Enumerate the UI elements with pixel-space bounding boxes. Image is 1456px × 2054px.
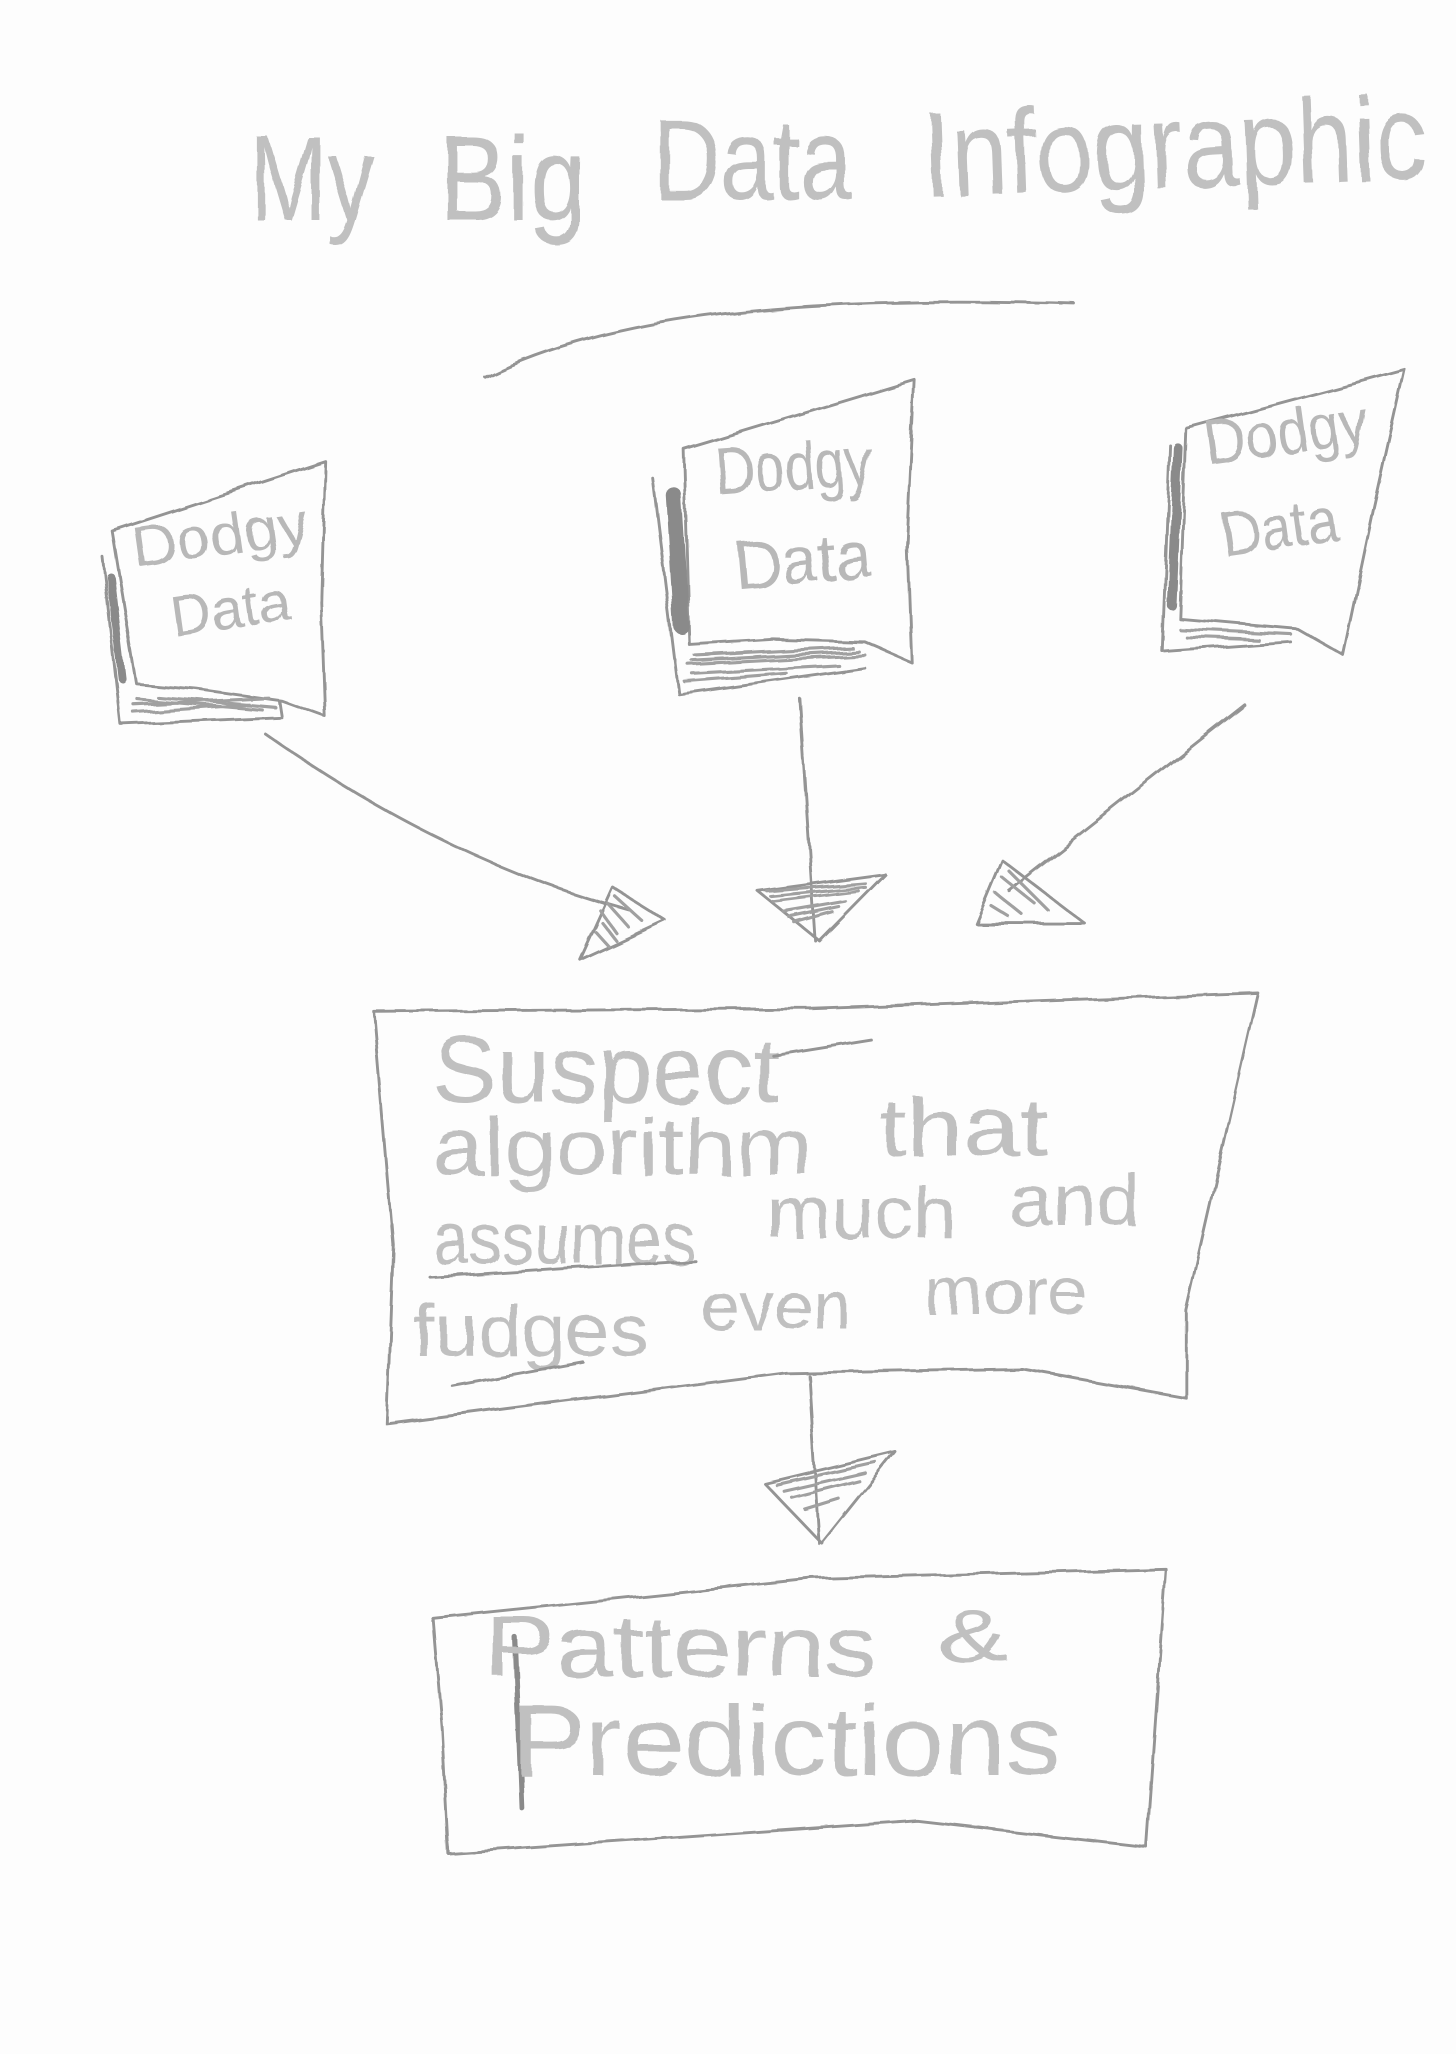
panel: suspect algorithm box: more: [924, 1255, 1088, 1328]
panel: suspect algorithm box: much: [767, 1172, 957, 1254]
panel: suspect algorithm box: even: [701, 1269, 852, 1345]
panel: left dodgy data book: [102, 461, 325, 724]
arrow: right book to algorithm: [976, 705, 1245, 924]
title: Big: [439, 111, 586, 246]
panel: suspect algorithm box: algorithm: [433, 1102, 812, 1193]
panel: right dodgy data book: Dodgy: [1200, 387, 1373, 479]
panel: right dodgy data book: Data: [1216, 485, 1343, 571]
arrow: centre book to algorithm: [757, 698, 885, 941]
panel: suspect algorithm box: fudges: [413, 1290, 649, 1372]
panel: suspect algorithm box: [374, 993, 1258, 1424]
panel: suspect algorithm box: assumes: [433, 1198, 695, 1280]
panel: patterns and predictions box: [433, 1569, 1166, 1854]
panel: right dodgy data book: [1162, 369, 1405, 655]
panel: left dodgy data book: Data: [166, 569, 295, 650]
title: Data: [653, 96, 853, 224]
panel: patterns and predictions box: Predictions: [511, 1686, 1061, 1797]
arrow: algorithm to patterns: [764, 1375, 895, 1543]
panel: suspect algorithm box: and: [1009, 1159, 1140, 1241]
title underline curve: [485, 302, 1074, 377]
arrow: left book to algorithm: [265, 734, 666, 960]
panel: centre dodgy data book: Dodgy: [713, 423, 875, 510]
panel: centre dodgy data book: Data: [731, 517, 875, 604]
panel: patterns and predictions box: &: [937, 1595, 1009, 1677]
panel: patterns and predictions box: Patterns: [485, 1600, 878, 1696]
panel: left dodgy data book: Dodgy: [128, 492, 312, 580]
panel: suspect algorithm box: Suspect: [433, 1015, 780, 1124]
title: My: [249, 111, 374, 246]
title: [249, 70, 1429, 246]
panel: suspect algorithm box: that: [878, 1082, 1048, 1173]
panel: centre dodgy data book: [653, 380, 915, 694]
